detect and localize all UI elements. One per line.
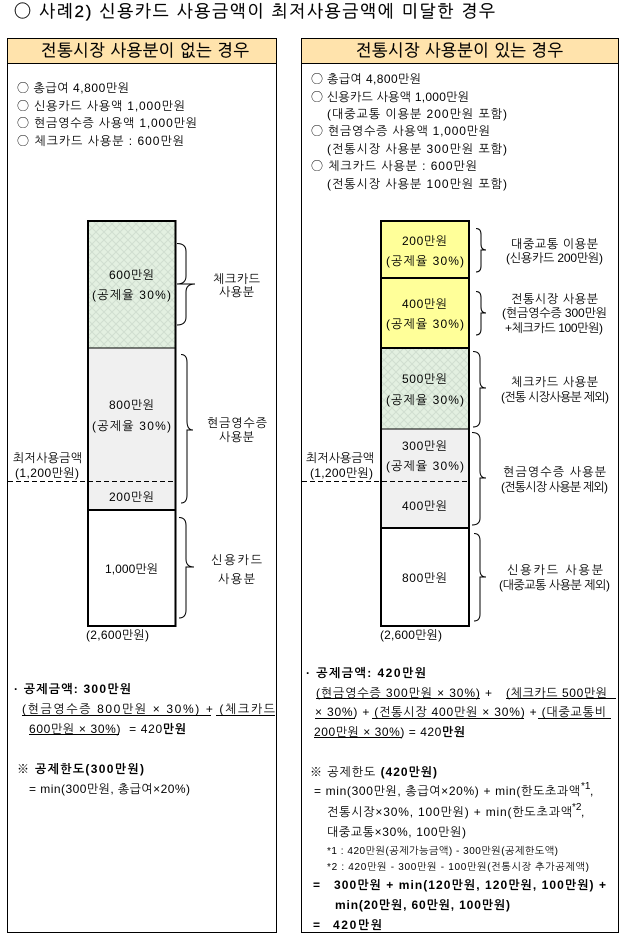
brace: traditional market: +체크카드 100만원)	[505, 321, 603, 335]
stacked bar left: 1,000만원	[105, 562, 158, 576]
stacked bar left: 600만원	[109, 268, 154, 282]
panel heading left: 전통시장 사용분이 없는 경우	[41, 42, 249, 60]
brace: credit card right	[474, 534, 610, 621]
conditions list right: ○ 체크카드 사용분 : 600만원	[311, 157, 477, 174]
deduction limit right: *1 : 420만원(공제가능금액) - 300만원(공제한도액)	[327, 845, 558, 857]
brace: check card left: 체크카드	[213, 272, 260, 286]
deduction amount left: 600만원 × 30%) = 420만원	[29, 722, 186, 736]
threshold line left	[8, 451, 175, 482]
conditions list left: ○ 현금영수증 사용액 1,000만원	[17, 114, 197, 131]
deduction limit left	[17, 760, 190, 796]
stacked bar right: 400만원	[402, 499, 447, 513]
brace: credit card left: 사용분	[218, 572, 255, 586]
deduction limit left: ※ 공제한도(300만원)	[17, 760, 144, 777]
brace: public transport: 대중교통 이용분	[511, 237, 598, 251]
panel heading right	[302, 38, 618, 64]
brace: traditional market: 전통시장 사용분	[511, 292, 598, 306]
brace: cash receipt right: 현금영수증 사용분	[503, 465, 606, 479]
brace: cash receipt left	[181, 354, 267, 503]
deduction limit right: =	[313, 918, 320, 932]
deduction amount left	[14, 682, 275, 736]
stacked bar right: (공제율 30%)	[386, 459, 464, 473]
deduction amount right: (현금영수증 300만원 × 30%) +	[316, 686, 492, 700]
brace: traditional market: (현금영수증 300만원	[502, 306, 607, 320]
panel: without traditional market use	[8, 38, 276, 932]
deduction limit right: *2	[572, 802, 582, 813]
deduction limit right: 전통시장×30%, 100만원) + min(한도초과액	[327, 805, 572, 819]
brace: credit card left	[179, 518, 262, 618]
threshold line right: (1,200만원)	[310, 466, 373, 480]
stacked bar right: 200만원	[402, 234, 447, 248]
deduction limit right: ※ 공제한도 (420만원)	[310, 763, 437, 780]
deduction limit right: 대중교통×30%, 100만원)	[327, 825, 466, 839]
brace: check card left	[177, 244, 260, 325]
brace: check card right: (전통 시장사용분 제외)	[501, 390, 609, 404]
total label left: (2,600만원)	[86, 628, 149, 642]
brace: check card right	[473, 352, 609, 427]
conditions list right: ○ 신용카드 사용액 1,000만원	[311, 88, 469, 105]
stacked bar right	[381, 221, 469, 626]
threshold line right	[302, 451, 469, 482]
deduction amount left: (현금영수증 800만원 × 30%) + (체크카드	[22, 702, 275, 716]
deduction limit right: 300만원 + min(120만원, 120만원, 100만원) +	[334, 878, 606, 892]
brace: cash receipt right	[472, 432, 608, 525]
conditions list left: ○ 신용카드 사용액 1,000만원	[17, 97, 185, 114]
deduction amount right: 200만원 × 30%) = 420만원	[314, 725, 465, 739]
threshold line right: 최저사용금액	[306, 451, 374, 465]
panel: with traditional market use	[302, 38, 618, 932]
brace: credit card right: (대중교통 사용분 제외)	[499, 578, 610, 592]
deduction limit left: = min(300만원, 총급여×20%)	[29, 782, 190, 796]
stacked bar left: 200만원	[109, 490, 154, 504]
threshold line left: 최저사용금액	[13, 451, 82, 465]
deduction amount right: · 공제금액: 420만원	[306, 666, 426, 680]
deduction amount left: · 공제금액: 300만원	[14, 682, 131, 696]
brace: check card right: 체크카드 사용분	[511, 375, 598, 389]
conditions list left: ○ 체크카드 사용분 : 600만원	[17, 132, 184, 149]
brace: check card left: 사용분	[219, 285, 254, 299]
deduction amount right: × 30%) + (전통시장 400만원 × 30%) + (대중교통비	[315, 705, 606, 719]
brace: traditional market	[476, 292, 607, 335]
stacked bar right: 800만원	[402, 571, 447, 585]
deduction limit right: *2 : 420만원 - 300만원 - 100만원(전통시장 추가공제액)	[327, 861, 589, 873]
stacked bar left: (공제율 30%)	[92, 288, 171, 302]
deduction limit right	[310, 763, 606, 932]
deduction limit right: *1	[581, 781, 591, 792]
deduction limit right: = min(300만원, 총급여×20%) + min(한도초과액	[314, 784, 580, 798]
deduction limit right: min(20만원, 60만원, 100만원)	[335, 898, 510, 912]
conditions list right: (전통시장 사용분 100만원 포함)	[327, 177, 507, 191]
brace: cash receipt left: 사용분	[219, 430, 254, 444]
stacked bar right: (공제율 30%)	[386, 393, 464, 407]
conditions list right: ○ 총급여 4,800만원	[311, 70, 421, 87]
deduction amount right	[306, 666, 616, 739]
panel heading left	[8, 38, 276, 64]
threshold line left: (1,200만원)	[15, 466, 79, 480]
conditions list left	[17, 79, 197, 149]
brace: cash receipt left: 현금영수증	[207, 416, 267, 430]
conditions list left: ○ 총급여 4,800만원	[17, 79, 129, 96]
stacked bar left	[88, 221, 176, 626]
deduction amount right: (체크카드 500만원	[506, 686, 607, 700]
stacked bar right: 400만원	[402, 297, 447, 311]
stacked bar right: 300만원	[402, 439, 447, 453]
total label right: (2,600만원)	[380, 628, 442, 642]
stacked bar right: (공제율 30%)	[386, 254, 464, 268]
brace: public transport	[476, 228, 603, 272]
conditions list right	[311, 70, 507, 191]
deduction limit right: ,	[581, 805, 584, 819]
deduction limit right: =	[313, 878, 320, 892]
panel heading right: 전통시장 사용분이 있는 경우	[356, 42, 563, 60]
brace: cash receipt right: (전통시장 사용분 제외)	[501, 480, 608, 494]
stacked bar left: (공제율 30%)	[92, 419, 171, 433]
conditions list right: (전통시장 사용분 300만원 포함)	[327, 142, 507, 156]
stacked bar right: (공제율 30%)	[386, 317, 464, 331]
brace: public transport: (신용카드 200만원)	[506, 251, 603, 265]
conditions list right: ○ 현금영수증 사용액 1,000만원	[311, 122, 490, 139]
brace: credit card right: 신용카드 사용분	[507, 563, 603, 577]
deduction limit right: 420만원	[333, 918, 382, 932]
brace: credit card left: 신용카드	[211, 553, 262, 567]
stacked bar right: 500만원	[402, 372, 447, 386]
conditions list right: (대중교통 이용분 200만원 포함)	[327, 107, 507, 121]
stacked bar left: 800만원	[109, 398, 154, 412]
deduction limit right: ,	[590, 784, 593, 798]
